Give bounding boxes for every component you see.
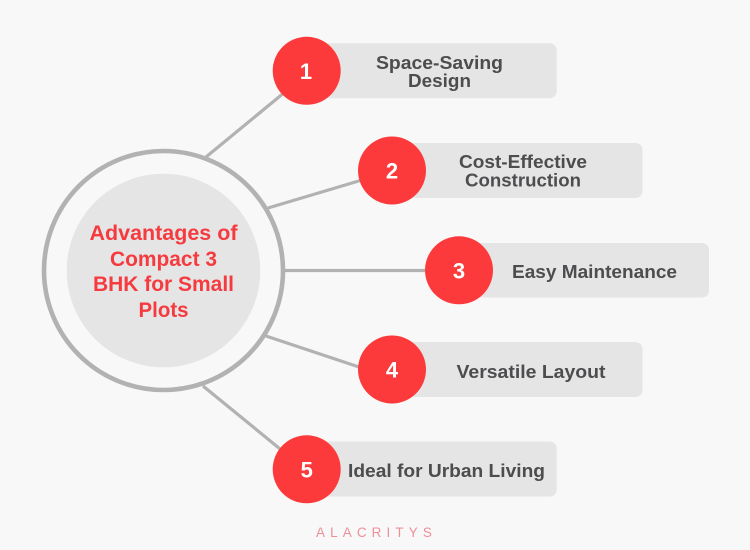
label: Construction	[465, 170, 581, 190]
item 5: Ideal for Urban Living	[273, 435, 557, 503]
label bar	[452, 243, 709, 298]
number: 1	[300, 59, 312, 84]
label bar	[300, 43, 557, 98]
item 4: Versatile Layout	[358, 336, 642, 404]
central hub	[44, 151, 283, 390]
number: 3	[453, 258, 465, 284]
badge	[358, 336, 426, 404]
brand wordmark: ALACRITYS	[316, 525, 437, 540]
central title: BHK for Small	[93, 273, 234, 296]
label	[376, 52, 503, 91]
label: Easy Maintenance	[512, 261, 677, 282]
outer ring	[44, 151, 283, 390]
label bar	[385, 143, 642, 198]
central title: Compact 3	[110, 248, 217, 271]
badge	[273, 37, 341, 105]
item 3: Easy Maintenance	[425, 236, 709, 304]
central title: Advantages of	[90, 222, 239, 245]
badge	[358, 136, 426, 204]
number: 4	[386, 358, 399, 382]
item 2: Cost-Effective Construction	[358, 136, 642, 204]
label: Design	[408, 70, 471, 91]
label: Versatile Layout	[456, 361, 606, 382]
number: 5	[301, 458, 313, 482]
inner disc	[67, 174, 260, 367]
number: 2	[386, 158, 398, 184]
item 1: Space-Saving Design	[273, 37, 557, 105]
central title: Plots	[138, 299, 188, 322]
central title	[90, 222, 239, 322]
badge	[425, 236, 493, 304]
label	[459, 151, 587, 190]
connector lines	[203, 92, 430, 453]
badge	[273, 435, 341, 503]
label bar	[300, 442, 557, 496]
label bar	[385, 342, 642, 397]
label: Space-Saving	[376, 52, 503, 73]
label: Ideal for Urban Living	[348, 460, 545, 481]
label: Cost-Effective	[459, 151, 587, 172]
